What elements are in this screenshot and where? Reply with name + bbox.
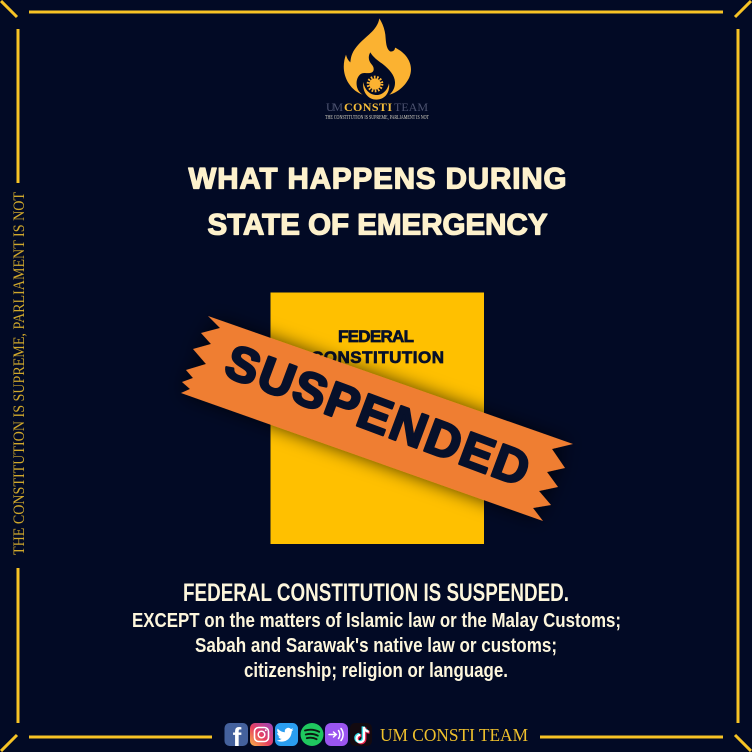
suspended tape <box>181 316 573 521</box>
constitution book <box>270 292 484 544</box>
logo wordmark: CONSTI <box>344 100 392 114</box>
explanation text: FEDERAL CONSTITUTION IS SUSPENDED. <box>183 579 569 607</box>
title: WHAT HAPPENS DURING <box>188 162 566 196</box>
explanation text: EXCEPT on the matters of Islamic law or the Malay Customs; <box>132 610 621 632</box>
book title: FEDERAL <box>338 327 414 346</box>
explanation text <box>132 579 621 682</box>
logo tagline: THE CONSTITUTION IS SUPREME, PARLIAMENT IS NOT <box>325 114 429 121</box>
explanation text: citizenship; religion or language. <box>244 660 508 682</box>
social footer <box>224 722 528 752</box>
logo flame icon <box>344 18 411 100</box>
logo crescent <box>363 82 389 100</box>
icon: spotify <box>300 723 324 746</box>
icon: podcast <box>325 723 348 746</box>
book title <box>311 327 444 367</box>
title <box>188 162 566 242</box>
logo wordmark: TEAM <box>394 100 428 114</box>
icon: facebook <box>224 722 248 752</box>
title: STATE OF EMERGENCY <box>208 208 548 242</box>
logo sun <box>369 78 381 90</box>
icon: tiktok <box>350 723 372 746</box>
torn orange tape strip <box>181 316 573 521</box>
explanation text: Sabah and Sarawak's native law or customs; <box>195 635 557 657</box>
vertical side motto: THE CONSTITUTION IS SUPREME, PARLIAMENT IS NOT <box>11 192 28 555</box>
book title: CONSTITUTION <box>311 348 444 367</box>
icon: facebook: f <box>233 722 242 752</box>
icon: instagram <box>250 723 273 746</box>
stamp word: SUSPENDED <box>218 335 537 497</box>
icon: twitter <box>275 723 298 746</box>
footer team name: UM CONSTI TEAM <box>380 725 528 745</box>
logo wordmark <box>326 100 428 114</box>
logo wordmark: UM <box>326 100 343 114</box>
logo <box>325 18 429 121</box>
